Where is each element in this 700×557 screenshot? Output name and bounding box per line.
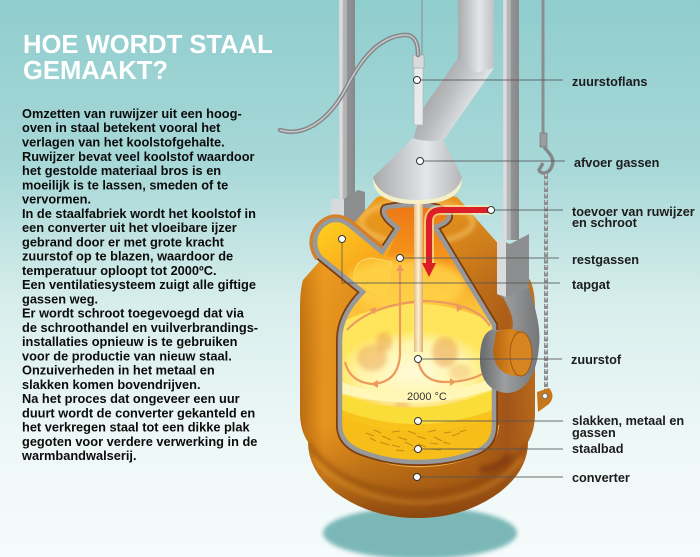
body text: oven in staal betekent vooral het	[22, 120, 221, 135]
body text: Omzetten van ruwijzer uit een hoog-	[22, 106, 242, 121]
body text: een converter uit het vloeibare ijzer	[22, 220, 237, 235]
body text: Onzuiverheden in het metaal en	[22, 362, 215, 378]
label: zuurstoflans: zuurstoflans	[572, 75, 647, 89]
label: staalbad	[414, 442, 623, 456]
fume hood	[373, 0, 494, 204]
converter lug	[537, 388, 552, 412]
title: GEMAAKT?	[23, 57, 168, 85]
converter body	[300, 194, 535, 518]
body text: het verkregen staal tot een dikke plak	[22, 420, 250, 434]
label: zuurstof	[414, 353, 622, 367]
right bracket and crane hook	[480, 234, 539, 393]
label: slakken, metaal en gassen	[414, 414, 684, 440]
body text: zuurstof op te blazen, waardoor de	[22, 248, 233, 264]
spout interior	[317, 222, 394, 274]
label: converter	[414, 471, 630, 485]
label: converter: converter	[572, 471, 630, 485]
temperature label: 2000 °C	[407, 391, 447, 403]
right support column	[503, 0, 519, 240]
label: staalbad: staalbad	[572, 442, 623, 456]
label: afvoer gassen: afvoer gassen	[574, 156, 659, 170]
body text: warmbandwalserij.	[21, 448, 137, 463]
gas flow arrows	[345, 264, 490, 388]
body text: Ruwijzer bevat veel koolstof waardoor	[22, 149, 255, 164]
body text: installaties opnieuw is te gebruiken	[22, 334, 238, 349]
body text: temperatuur oploopt tot 2000ºC.	[22, 263, 217, 278]
body text: slakken komen bovendrijven.	[22, 377, 201, 392]
body text: duurt wordt de converter gekanteld en	[22, 406, 255, 420]
label: restgassen	[396, 253, 639, 267]
feed arrow	[422, 210, 491, 277]
label: slakken, metaal en gassen: slakken, metaal en	[572, 414, 684, 428]
body text: gegoten voor verdere verwerking in de	[22, 434, 257, 449]
floor shadow	[323, 507, 517, 557]
left support column	[331, 0, 365, 235]
label: slakken, metaal en gassen: gassen	[572, 426, 616, 440]
body text: In de staalfabriek wordt het koolstof in	[22, 206, 256, 221]
title: HOE WORDT STAAL	[23, 31, 273, 59]
label: toevoer van ruwijzer en schroot	[488, 205, 695, 230]
label: toevoer van ruwijzer en schroot: toevoer van ruwijzer	[572, 205, 695, 219]
steel bath	[342, 410, 492, 460]
body text: vervormen.	[22, 192, 91, 206]
label: zuurstoflans	[414, 75, 647, 89]
body text: Na het proces dat ongeveer een uur	[22, 391, 240, 406]
body text: het gestolde materiaal bros is en	[22, 163, 221, 178]
label: toevoer van ruwijzer en schroot: en schroot	[572, 216, 638, 230]
label: afvoer gassen	[416, 156, 659, 170]
body text: voor de productie van nieuw staal.	[22, 348, 232, 364]
label: restgassen: restgassen	[572, 253, 639, 267]
label: tapgat	[338, 236, 611, 292]
body text: de schroothandel en vuilverbrandings-	[22, 320, 258, 335]
label: zuurstof: zuurstof	[571, 353, 622, 367]
oxygen lance top	[413, 0, 424, 125]
body text: gassen weg.	[22, 292, 98, 306]
body text: Een ventilatiesysteem zuigt alle giftige	[22, 277, 256, 292]
foam	[336, 304, 498, 400]
body text: verlagen van het koolstofgehalte.	[22, 134, 225, 150]
body text: moeilijk is te lassen, smeden of te	[22, 178, 228, 192]
body text: gebrand door er met grote kracht	[22, 234, 225, 250]
label: tapgat: tapgat	[572, 278, 611, 292]
crane rod and chain	[539, 0, 553, 392]
oxygen hose	[280, 35, 418, 132]
body text: Er wordt schroot toegevoegd dat via	[22, 306, 245, 320]
converter cavity	[315, 200, 500, 470]
oxygen lance in vessel	[414, 204, 423, 352]
